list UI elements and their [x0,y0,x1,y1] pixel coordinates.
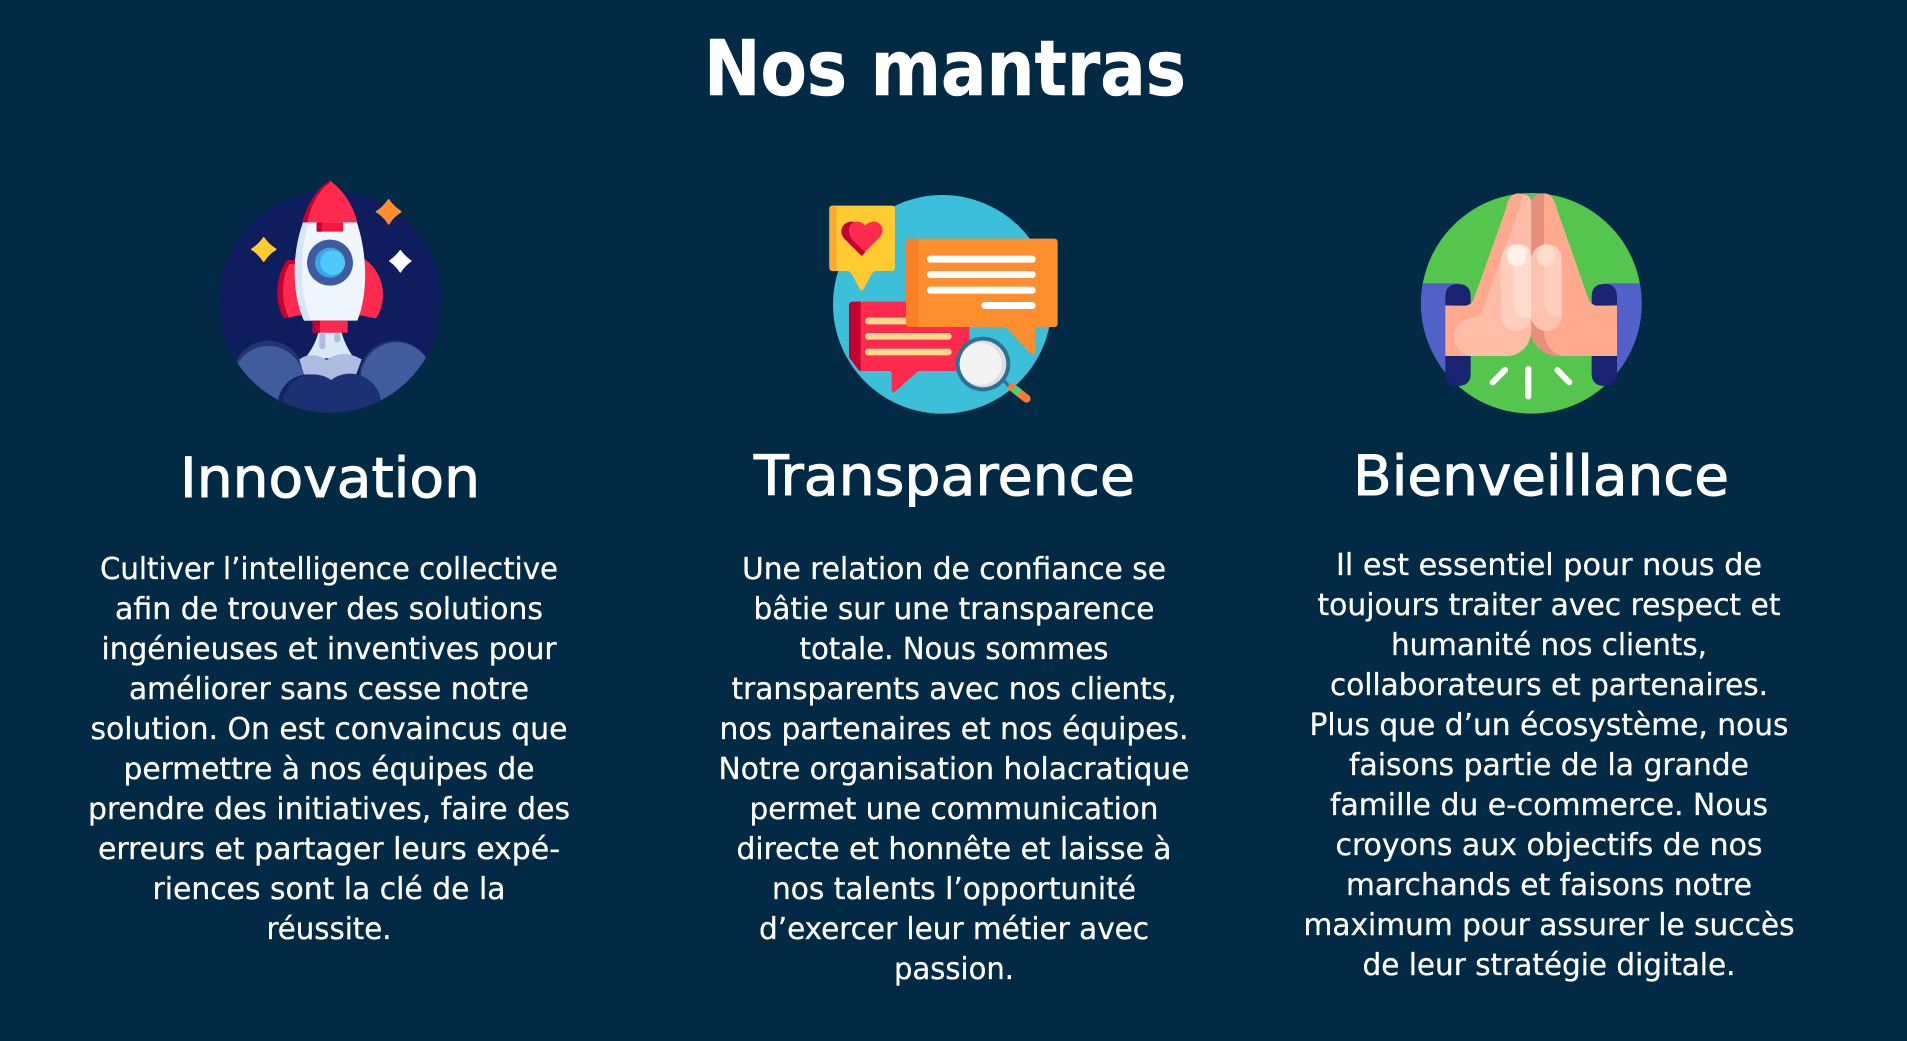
heading: Bienveillance: Bienveillance [1353,444,1729,508]
text block: Innovation: permettre à nos équipes de [124,752,534,787]
icon: speech bubbles [829,195,1058,414]
text block: Bienveillance: Il est essentiel pour nous de [1336,548,1762,583]
text block: Innovation: solution. On est convaincus que [90,712,568,747]
text block: Transparence: totale. Nous sommes [800,632,1108,667]
text block: Innovation: prendre des initiatives, faire des [88,792,570,827]
text block: Transparence: nos partenaires et nos équipes. [720,712,1188,747]
text block: Transparence: Une relation de confiance se [742,552,1166,587]
icon: joined hands [1420,193,1644,414]
panel: bienveillance [1304,193,1794,983]
text block: Bienveillance: collaborateurs et partenaires. [1330,668,1768,703]
text block: Transparence: d’exercer leur métier avec [759,912,1149,947]
heading: Transparence: Transparence [753,444,1135,508]
text block: Bienveillance: toujours traiter avec respect et [1318,588,1780,623]
text block: Innovation: erreurs et partager leurs expé- [98,832,560,867]
text block: Innovation: améliorer sans cesse notre [129,672,529,707]
text block: Innovation: réussite. [266,912,392,947]
text block: Bienveillance: humanité nos clients, [1391,628,1707,663]
text block: Bienveillance: Plus que d’un écosystème, nous [1310,708,1788,743]
text block: Bienveillance: croyons aux objectifs de nos [1336,828,1762,863]
text block: Transparence: nos talents l’opportunité [772,872,1136,907]
text block: Innovation: afin de trouver des solutions [115,592,543,627]
text block: Bienveillance: maximum pour assurer le succès [1304,908,1794,943]
text block: Bienveillance [1304,548,1794,983]
panel: transparence [718,195,1190,987]
text block: Transparence: passion. [894,952,1014,987]
text block: Transparence: bâtie sur une transparence [754,592,1154,627]
text block: Innovation [88,552,570,947]
panel: innovation [88,181,570,947]
text block: Bienveillance: de leur stratégie digitale. [1362,948,1736,983]
text block: Bienveillance: faisons partie de la grande [1349,748,1749,783]
text block: Transparence: transparents avec nos clients, [732,672,1176,707]
icon: rocket [219,181,441,436]
title: Nos mantras [704,25,1186,114]
text block: Transparence: directe et honnête et laisse à [736,832,1172,867]
text block: Innovation: ingénieuses et inventives pour [102,632,557,667]
text block: Innovation: riences sont la clé de la [152,872,506,907]
text block: Transparence: permet une communication [750,792,1158,827]
text block: Innovation: Cultiver l’intelligence collective [100,552,558,587]
text block: Bienveillance: famille du e-commerce. Nous [1330,788,1768,823]
text block: Transparence [718,552,1190,987]
heading: Innovation: Innovation [180,446,480,510]
text block: Bienveillance: marchands et faisons notre [1346,868,1752,903]
text block: Transparence: Notre organisation holacratique [718,752,1190,787]
